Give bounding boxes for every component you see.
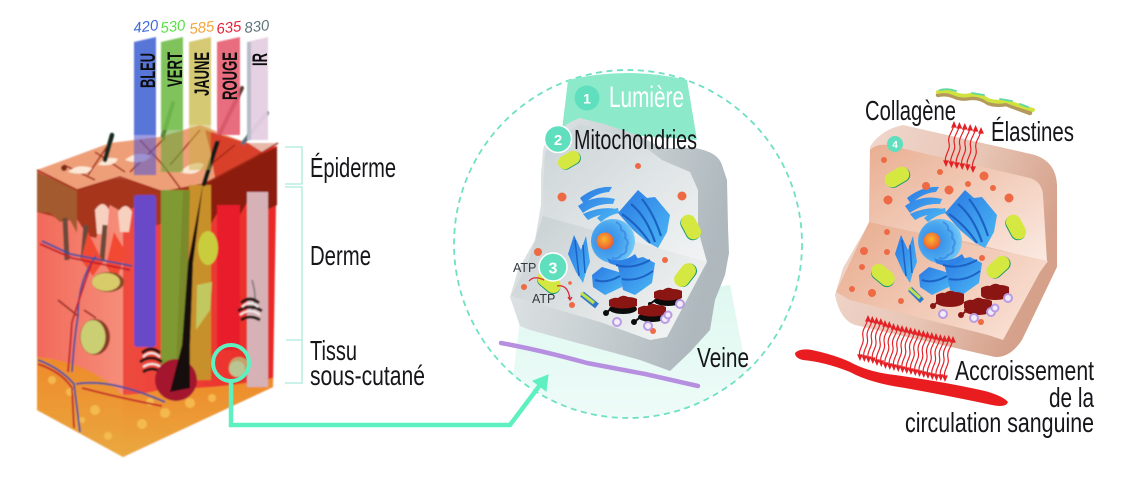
panel: skin cross-section bbox=[37, 17, 278, 457]
colored light bars in the dermis bbox=[134, 195, 156, 347]
lower red arrows bbox=[858, 316, 955, 380]
layer brackets bbox=[285, 147, 302, 383]
organelles: nucleus and stacks bbox=[568, 187, 670, 295]
ATP labels bbox=[513, 261, 555, 306]
upper red arrows bbox=[944, 122, 983, 172]
hairs bbox=[105, 88, 267, 184]
rod organelle bbox=[581, 293, 597, 306]
ATP labels: ATP bbox=[513, 261, 536, 275]
mitochondria bbox=[534, 148, 704, 297]
cell back wall bbox=[543, 124, 707, 262]
label: Tissu sous-cutané bbox=[310, 335, 425, 391]
hair follicle bbox=[155, 359, 197, 401]
vein bbox=[501, 343, 698, 386]
label: Accroissement de la circulation sanguine: Accroissement bbox=[955, 355, 1094, 386]
label: Tissu sous-cutané: Tissu bbox=[310, 335, 357, 366]
label: Élastines: Élastines bbox=[991, 116, 1074, 147]
cell back wall bbox=[869, 145, 1047, 262]
color band labels: VERT bbox=[164, 52, 187, 87]
badge 1: 1 bbox=[583, 90, 591, 106]
label: Derme: Derme bbox=[310, 240, 371, 271]
wavelength labels: 635 bbox=[215, 18, 243, 38]
cell floor bbox=[836, 222, 1048, 340]
badge 2 bbox=[544, 126, 572, 152]
ATP labels: ATP bbox=[532, 292, 555, 306]
label: Collagène: Collagène bbox=[865, 95, 956, 126]
badge 3: 3 bbox=[549, 260, 558, 278]
panel: magnified grey cell bbox=[454, 70, 802, 440]
wavelength labels: 585 bbox=[188, 18, 216, 38]
collagen and elastin strand bbox=[938, 89, 1033, 113]
ribosome complexes bbox=[603, 288, 684, 330]
rod organelle bbox=[909, 288, 922, 301]
label: Accroissement de la circulation sanguine bbox=[905, 355, 1094, 438]
color band labels: BLEU bbox=[137, 53, 160, 88]
red blood vessel bbox=[795, 349, 1008, 406]
vesicles bbox=[849, 157, 1014, 325]
connector arrow from skin to cell bbox=[213, 345, 548, 425]
badge 1 bbox=[574, 86, 600, 110]
color band labels: IR bbox=[249, 53, 272, 66]
color band labels: ROUGE bbox=[219, 52, 242, 100]
sweat glands bbox=[92, 272, 124, 292]
ATP reaction arrows bbox=[529, 278, 572, 300]
label: Épiderme: Épiderme bbox=[310, 152, 396, 183]
label: Veine: Veine bbox=[697, 342, 749, 373]
color band labels: JAUNE bbox=[191, 52, 214, 96]
badge 3 bbox=[539, 253, 567, 281]
label: Lumière: Lumière bbox=[609, 81, 684, 114]
wavelength labels: 420 bbox=[132, 17, 160, 37]
wavelength labels: 830 bbox=[243, 17, 271, 37]
pale light beam bbox=[513, 285, 746, 418]
vesicles bbox=[521, 163, 686, 334]
blood vessels bbox=[38, 241, 165, 432]
dashed magnifier circle bbox=[454, 70, 802, 418]
mitochondria bbox=[868, 164, 1029, 290]
badge 4: 4 bbox=[892, 140, 898, 151]
panel: treated peach cell bbox=[795, 89, 1094, 438]
light beam trapezoid bbox=[562, 73, 697, 140]
organelles: nucleus and stacks bbox=[895, 187, 997, 295]
badge 2: 2 bbox=[554, 132, 562, 149]
badge 4 bbox=[887, 136, 903, 152]
wavelength labels bbox=[132, 17, 271, 38]
coiled glands bbox=[140, 299, 262, 372]
cell floor bbox=[511, 216, 707, 340]
color band labels bbox=[137, 52, 272, 100]
label: Mitochondries: Mitochondries bbox=[574, 124, 697, 155]
cell body bbox=[835, 125, 1057, 357]
label: Tissu sous-cutané: sous-cutané bbox=[310, 360, 425, 391]
label: Accroissement de la circulation sanguine: de la bbox=[1049, 382, 1094, 413]
wavelength labels: 530 bbox=[159, 17, 187, 37]
skin block illustration bbox=[37, 88, 278, 457]
light bars above the skin bbox=[134, 37, 268, 175]
cell body bbox=[510, 118, 729, 371]
ribosome complexes bbox=[930, 284, 1012, 322]
